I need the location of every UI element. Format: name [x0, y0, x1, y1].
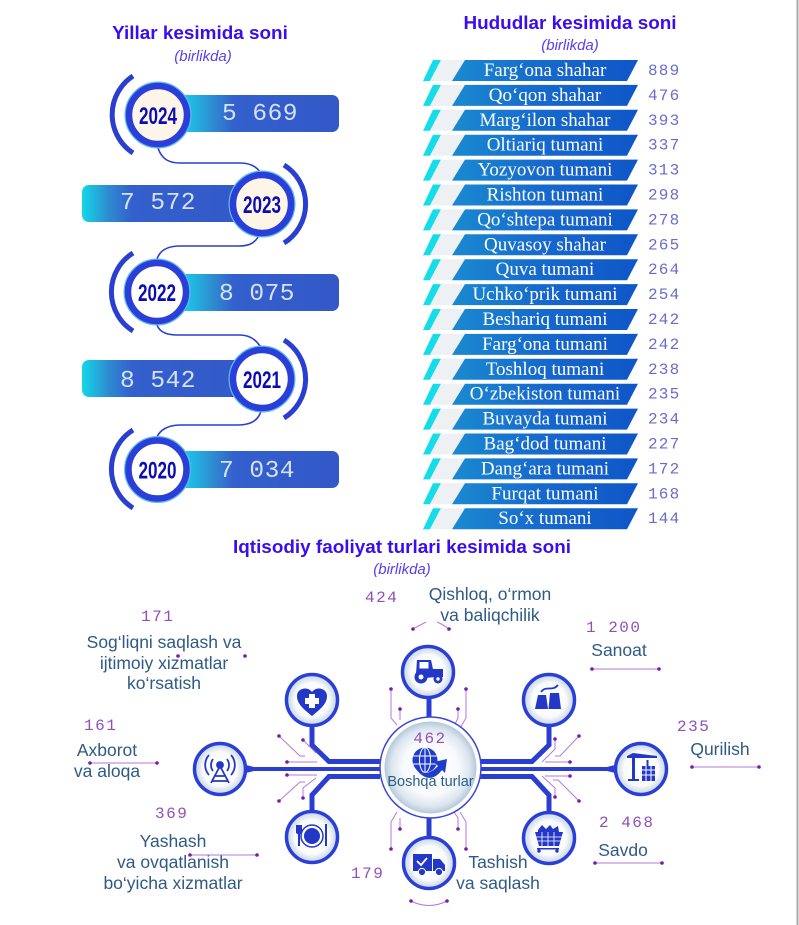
region list — [423, 60, 680, 529]
label: Sanoat — [586, 619, 661, 671]
node: heart — [286, 674, 338, 726]
region: Quva tumani: 264 — [648, 261, 680, 279]
year row 2023: 2023 — [243, 192, 281, 219]
icon: antenna tower — [205, 755, 235, 783]
page edge line — [796, 0, 798, 925]
heading: years: (birlikda) — [174, 48, 232, 65]
year row 2022: 2022 — [138, 280, 176, 307]
heading: years: Yillar kesimida soni — [112, 23, 288, 44]
heading: regions: Hududlar kesimida soni — [463, 13, 677, 34]
region: Yozyovon tumani: Yozyovon tumani — [478, 160, 612, 181]
label: Sanoat: Sanoat — [591, 640, 647, 660]
label: Yashash va ovqatlanish: 369 — [155, 805, 188, 823]
region: Qo'shtepa tumani: Qo‘shtepa tumani — [477, 209, 613, 230]
node: cart — [524, 812, 574, 864]
region: Buvayda tumani: 234 — [648, 411, 680, 429]
region: Farg'ona tumani — [423, 334, 680, 355]
region: Toshloq tumani — [423, 359, 680, 380]
label: Qishloq, o'rmon: 424 — [365, 589, 398, 607]
label: Tashish va saqlash: 179 — [351, 865, 384, 883]
label: Sog'liqni saqlash — [87, 608, 247, 693]
label: Axborot va aloqa: 161 — [84, 717, 117, 735]
region: So'x tumani: 144 — [648, 510, 680, 528]
region: Yozyovon tumani — [423, 160, 680, 181]
year row 2021: 2021 — [243, 367, 281, 394]
heading: economic activities — [233, 537, 571, 578]
region: O'zbekiston tumani: 235 — [648, 386, 680, 404]
region: Dang'ara tumani: Dang‘ara tumani — [481, 458, 609, 479]
region: So'x tumani: So‘x tumani — [498, 508, 592, 529]
label: Qishloq, o'rmon: Qishloq, o‘rmon — [429, 584, 551, 604]
region: Oltiariq tumani: 337 — [648, 137, 680, 155]
region: Dang'ara tumani — [423, 458, 680, 479]
region: So'x tumani — [423, 508, 680, 529]
region: Quvasoy shahar: 265 — [648, 236, 680, 254]
label: Tashish va saqlash — [351, 852, 540, 893]
region: Rishton tumani: Rishton tumani — [487, 184, 603, 206]
region: O'zbekiston tumani — [423, 384, 680, 405]
region: Qo'qon shahar: Qo‘qon shahar — [489, 85, 602, 106]
label: Sanoat: 1 200 — [586, 619, 642, 637]
label: Axborot va aloqa: Axborot — [77, 740, 137, 760]
region: Qo'shtepa tumani: 278 — [648, 211, 680, 229]
region: Furqat tumani — [423, 483, 680, 504]
region: Oltiariq tumani: Oltiariq tumani — [487, 135, 603, 156]
icon: factory — [535, 685, 561, 709]
label: Sog'liqni saqlash: ijtimoiy xizmatlar — [100, 653, 228, 673]
region: Beshariq tumani — [423, 309, 680, 330]
year row 2020: 7 034 — [219, 458, 295, 485]
label: Tashish va saqlash: va saqlash — [456, 873, 540, 893]
region: Beshariq tumani: Beshariq tumani — [482, 309, 608, 330]
center hub: Boshqa turlar: 462 — [413, 730, 447, 748]
node: plate — [286, 812, 338, 862]
region: Quvasoy shahar — [423, 234, 680, 255]
label: Savdo — [593, 814, 664, 865]
region: Uchko'prik tumani: 254 — [648, 286, 680, 304]
region: Rishton tumani — [423, 184, 680, 206]
hub connector lines — [220, 695, 641, 840]
region: Buvayda tumani: Buvayda tumani — [482, 409, 608, 430]
heading: economic activities: Iqtisodiy faoliyat turlari kesimida soni — [233, 537, 571, 558]
region: Bag'dod tumani: 227 — [648, 436, 680, 454]
region: Beshariq tumani: 242 — [648, 311, 680, 329]
center hub: Boshqa turlar: Boshqa turlar — [387, 774, 474, 790]
region: Toshloq tumani: Toshloq tumani — [486, 359, 604, 380]
region: Bag'dod tumani: Bag‘dod tumani — [484, 434, 606, 454]
label: Yashash va ovqatlanish: bo‘yicha xizmatlar — [103, 873, 243, 893]
region: Quva tumani — [423, 259, 680, 280]
year row 2024: 5 669 — [222, 101, 298, 128]
label: Yashash va ovqatlanish: Yashash — [140, 831, 206, 851]
label: Yashash va ovqatlanish — [103, 805, 259, 893]
region: Uchko'prik tumani — [423, 284, 680, 305]
label: Axborot va aloqa — [74, 717, 159, 781]
node: tractor — [402, 646, 454, 698]
label: Savdo: 2 468 — [599, 814, 655, 832]
region: Quva tumani: Quva tumani — [496, 259, 594, 280]
label: Qurilish: Qurilish — [690, 739, 750, 759]
year row 2022: 8 075 — [219, 281, 295, 308]
label: Savdo: Savdo — [598, 840, 648, 860]
heading: economic activities: (birlikda) — [373, 561, 431, 578]
region: Buvayda tumani — [423, 409, 680, 430]
year row 2024 — [112, 76, 339, 153]
year row 2022 — [111, 253, 339, 331]
region: Rishton tumani: 298 — [648, 186, 680, 204]
year row 2021 — [82, 340, 306, 418]
region: Farg'ona shahar — [423, 60, 680, 81]
region: Furqat tumani: Furqat tumani — [491, 483, 599, 504]
connector lines between years — [157, 148, 261, 437]
heading: regions — [463, 13, 677, 54]
center hub: Boshqa turlar — [380, 717, 481, 818]
heading: regions: (birlikda) — [541, 37, 599, 54]
region: O'zbekiston tumani: O‘zbekiston tumani — [470, 384, 620, 405]
year row 2023 — [82, 165, 306, 243]
node: truck — [404, 838, 454, 888]
region: Marg'ilon shahar — [423, 110, 680, 131]
label: Axborot va aloqa: va aloqa — [74, 761, 140, 781]
label: Yashash va ovqatlanish: va ovqatlanish — [117, 852, 229, 872]
label: Tashish va saqlash: Tashish — [468, 852, 528, 872]
label: Sog'liqni saqlash: ko‘rsatish — [127, 673, 201, 693]
year row 2024: 2024 — [139, 103, 177, 130]
icon: heart with cross — [297, 689, 327, 716]
region: Quvasoy shahar: Quvasoy shahar — [484, 234, 607, 255]
decorative circuit traces — [277, 622, 581, 906]
icon: tractor — [414, 660, 443, 684]
label: Qurilish: 235 — [677, 718, 710, 736]
region: Toshloq tumani: 238 — [648, 361, 680, 379]
label: Qurilish — [677, 718, 761, 769]
label: Sog'liqni saqlash: Sog‘liqni saqlash va — [87, 632, 242, 652]
region: Farg'ona tumani: 242 — [648, 336, 680, 354]
region: Marg'ilon shahar: Marg‘ilon shahar — [479, 110, 611, 131]
heading: years — [112, 23, 288, 65]
region: Farg'ona shahar: Farg‘ona shahar — [484, 60, 607, 81]
region: Oltiariq tumani — [423, 135, 680, 156]
region: Qo'shtepa tumani — [423, 209, 680, 230]
year row 2021: 8 542 — [120, 368, 196, 395]
node: factory — [524, 674, 574, 726]
region: Marg'ilon shahar: 393 — [648, 112, 680, 130]
region: Bag'dod tumani — [423, 434, 680, 454]
region: Farg'ona shahar: 889 — [648, 62, 680, 80]
node: antenna — [194, 744, 246, 794]
icon: delivery truck — [413, 854, 445, 876]
region: Farg'ona tumani: Farg‘ona tumani — [482, 334, 608, 355]
icon: plate and cutlery — [296, 824, 327, 847]
icon: shopping cart — [535, 825, 563, 853]
label: Qishloq, o'rmon — [365, 584, 551, 625]
year row 2023: 7 572 — [120, 190, 196, 217]
year row 2020 — [111, 430, 339, 508]
region: Yozyovon tumani: 313 — [648, 162, 680, 180]
region: Qo'qon shahar: 476 — [648, 87, 680, 105]
icon: crane and building — [627, 753, 657, 781]
region: Dang'ara tumani: 172 — [648, 460, 680, 478]
label: Qishloq, o'rmon: va baliqchilik — [440, 605, 540, 625]
node: crane — [616, 744, 666, 794]
region: Qo'qon shahar — [423, 85, 680, 106]
label: Sog'liqni saqlash: 171 — [141, 608, 174, 626]
region: Furqat tumani: 168 — [648, 485, 680, 503]
region: Uchko'prik tumani: Uchko‘prik tumani — [472, 284, 618, 305]
year row 2020: 2020 — [138, 458, 176, 484]
icon: globe — [412, 748, 447, 778]
